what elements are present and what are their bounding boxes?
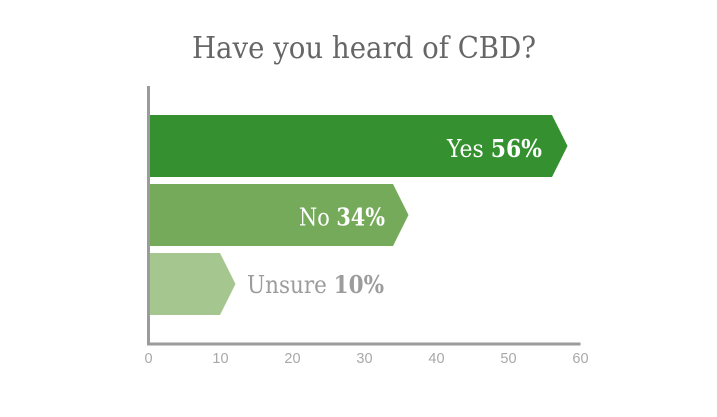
bar: Yes 56%: Yes 56% xyxy=(446,134,542,163)
x-axis tick labels: 60 xyxy=(572,351,589,367)
bar: Unsure 10% xyxy=(150,253,384,315)
x-axis tick labels: 30 xyxy=(356,351,373,367)
x-axis tick labels: 10 xyxy=(212,351,229,367)
x-axis tick labels: 40 xyxy=(428,351,445,367)
x-axis tick labels: 50 xyxy=(500,351,517,367)
chart axes xyxy=(148,86,580,344)
bar: No 34%: No 34% xyxy=(299,202,385,232)
bar: Yes 56% xyxy=(150,115,568,177)
bar: No 34% xyxy=(150,184,408,246)
title: Have you heard of CBD? xyxy=(192,31,536,66)
bar: Unsure 10%: Unsure 10% xyxy=(247,270,384,299)
x-axis tick labels: 20 xyxy=(284,351,301,367)
x-axis tick labels: 0 xyxy=(144,351,153,367)
x-axis tick labels xyxy=(144,351,589,367)
